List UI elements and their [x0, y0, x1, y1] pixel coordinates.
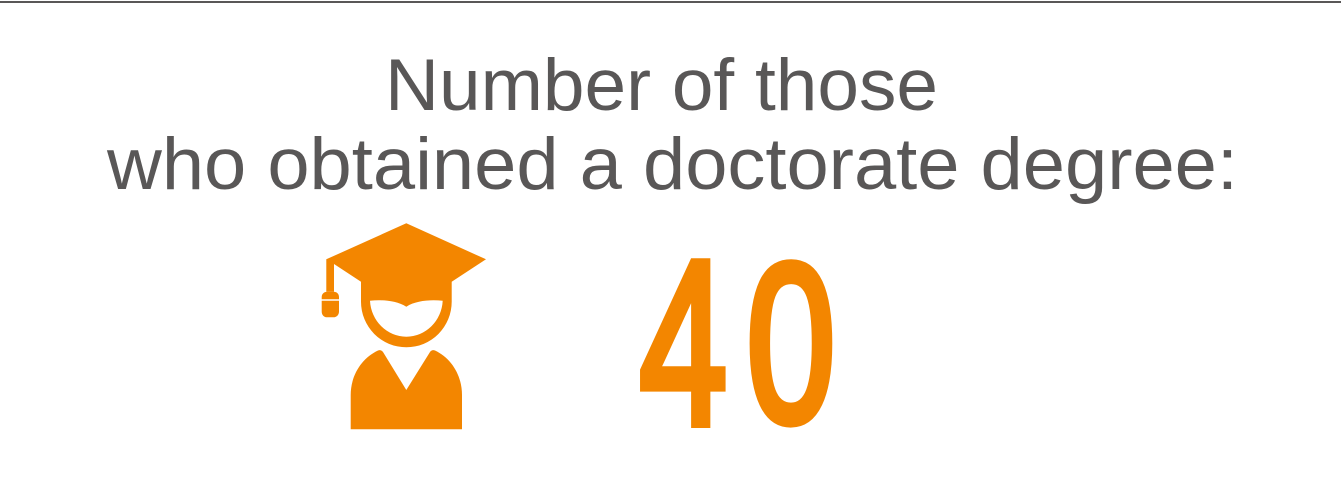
title — [106, 45, 1238, 205]
digit 4: 4 — [640, 214, 727, 474]
digit 0: 0 — [746, 218, 835, 469]
title line 1: Number of those — [385, 45, 938, 126]
icon: graduate with mortarboard cap — [322, 223, 486, 429]
title line 2: who obtained a doctorate degree: — [106, 124, 1238, 205]
icon: cap and head outline — [326, 223, 486, 347]
number: 40 — [640, 214, 835, 474]
icon: tassel — [322, 292, 339, 317]
icon: gown body — [351, 350, 462, 429]
